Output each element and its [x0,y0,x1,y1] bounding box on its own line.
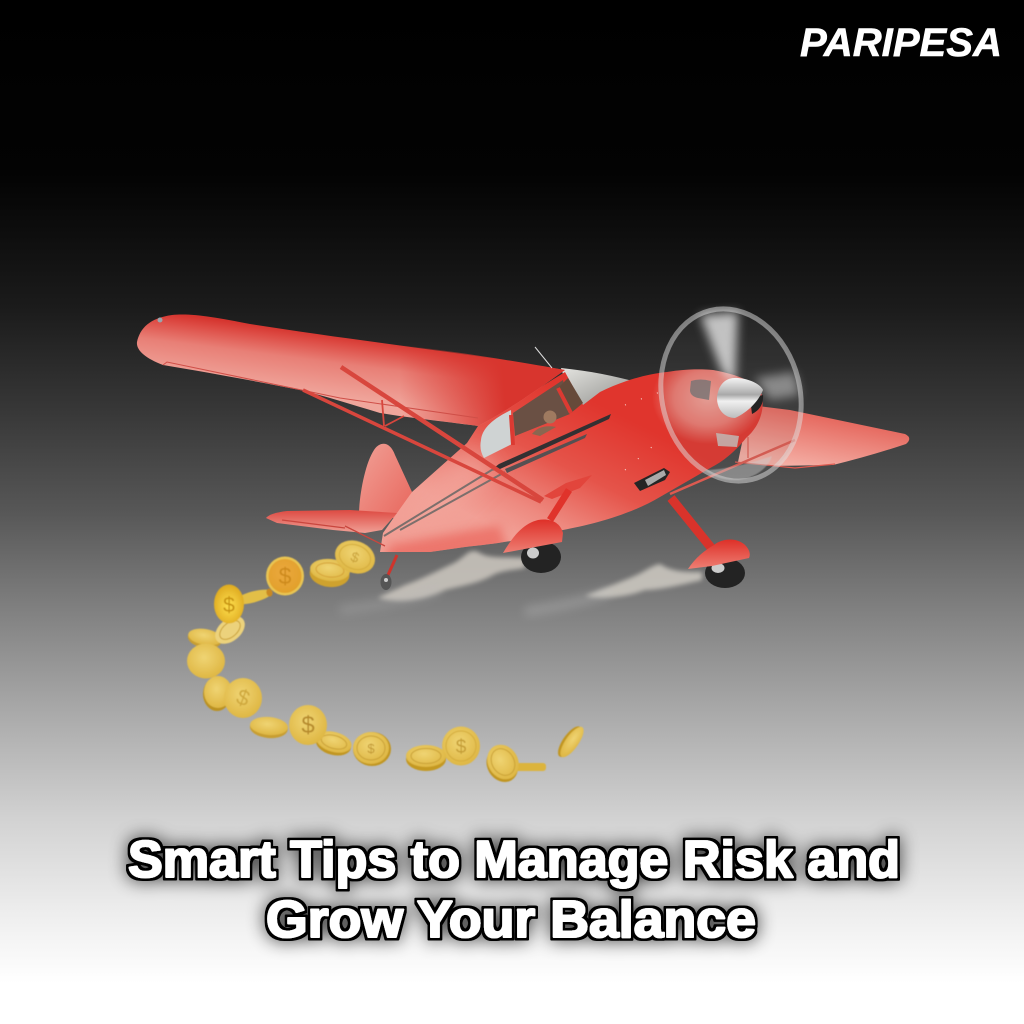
smoke: right wheel [525,564,702,612]
pilot [532,410,556,436]
propeller disc [643,294,819,496]
gear wheel [705,558,745,588]
title line 1: Smart Tips to Manage Risk and [128,831,900,889]
smoke: left wheel [340,551,525,610]
exhaust hatch [634,468,670,491]
fuselage rear highlight [434,446,496,494]
left main gear [503,475,592,573]
windshield glass [561,368,636,405]
tail fin [359,444,412,520]
coin 16 [442,726,480,766]
wing struts [303,367,543,502]
smoke trails [340,551,702,612]
propeller spinner [717,378,763,418]
cowl detail [625,380,739,491]
coin 19 [554,722,588,761]
cabin interior [513,380,570,436]
coin trail [186,535,588,788]
fuselage main body [380,369,763,552]
coin 14 [353,732,391,766]
horizontal stabilizer [266,510,397,546]
coin 10 [224,678,262,718]
coin 13 [313,728,354,759]
main wing [137,314,565,426]
tail wheel [380,555,397,590]
fuselage stripes [384,414,611,536]
coin 10: $ [233,684,253,711]
coin 3: $ [279,563,292,589]
cabin frames [511,388,571,445]
coin 7 [186,626,223,651]
cabin [480,378,583,458]
coin 12: $ [301,712,315,739]
cabin side window [480,410,512,458]
coin 5: $ [223,594,235,617]
coin 2 [308,557,351,589]
coin 15 [406,745,446,771]
coin 14: $ [367,741,375,756]
fuselage rear underside [382,522,509,552]
coin 16: $ [456,737,467,758]
gear strut [671,498,713,550]
coin 9 [203,676,232,711]
far wing [735,405,909,468]
title [128,831,900,949]
gear wheel [521,541,561,573]
coin 4 [232,587,274,607]
fuselage [380,369,763,552]
coin 5 [214,584,244,624]
coin 1 [330,535,380,579]
antenna [535,347,552,368]
cowl highlight [654,369,760,442]
gear strut [550,490,569,520]
coin 18 [509,763,546,771]
coin 6 [210,611,250,649]
gear mount [544,475,592,499]
gear fairing [688,540,750,569]
coin 12 [289,705,327,745]
coin 17 [479,739,526,788]
rear windshield brown [558,378,583,413]
coin 1: $ [349,548,362,566]
nose strut to far wing [670,440,795,494]
logo: Paripesa: PARIPESA [800,21,1002,65]
right main gear [671,498,750,588]
coin 3 [266,556,304,596]
coin 11 [249,715,289,740]
gear fairing [503,520,563,553]
coin 8 [187,644,225,678]
airplane [137,294,909,590]
title line 2: Grow Your Balance [266,891,756,949]
